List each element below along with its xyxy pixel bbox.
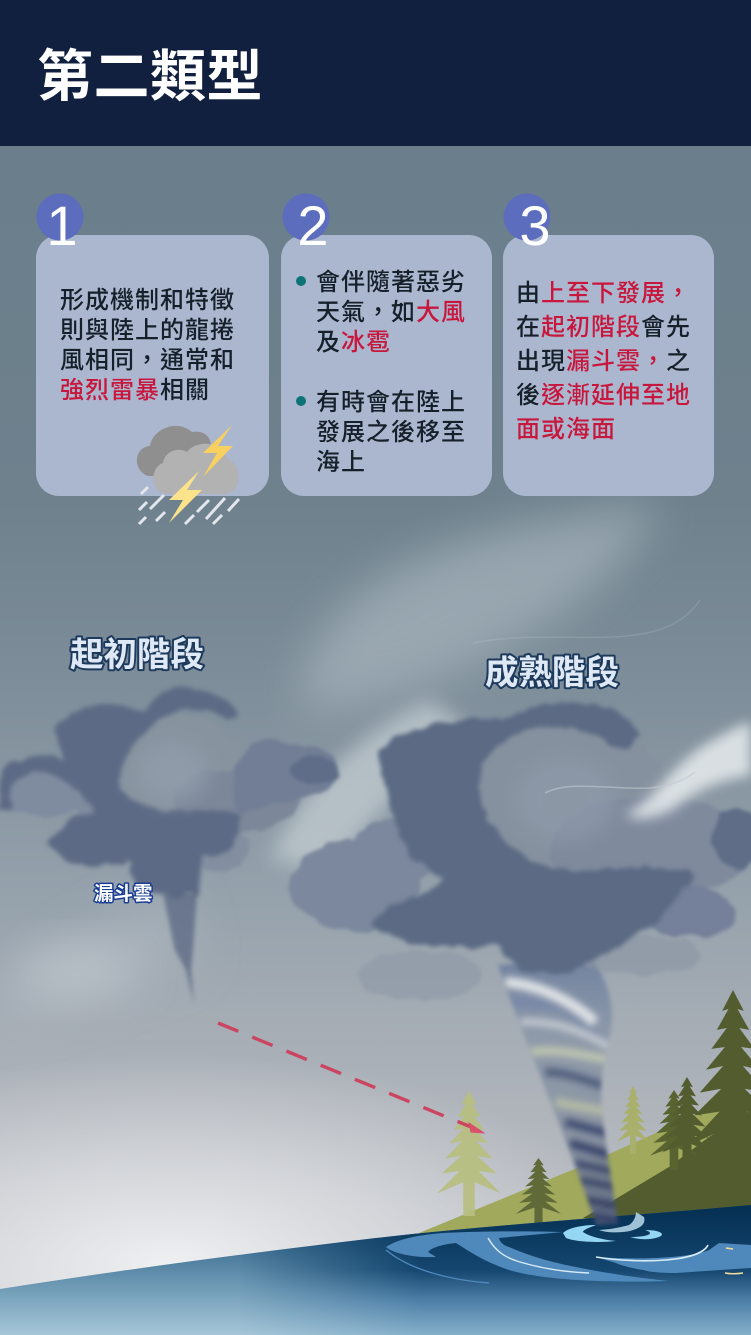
- panel: step 2: [281, 194, 492, 496]
- number 2: 2: [297, 194, 329, 257]
- step 1 text: 強烈雷暴: [60, 377, 160, 404]
- twin dark pines: [650, 1090, 682, 1166]
- bullet one text: 大風: [416, 299, 466, 326]
- bullet one: [296, 276, 306, 286]
- bullet two: [296, 396, 306, 406]
- step 3 text: 漏斗雲，之: [566, 348, 691, 375]
- step 3 text: 由: [516, 280, 541, 307]
- far light tree: [617, 1086, 649, 1154]
- number 1: 1: [46, 194, 78, 257]
- number badge 3: [504, 194, 550, 240]
- step 3 text: 後: [516, 382, 541, 409]
- light pine tree: [437, 1091, 501, 1216]
- label: funnel cloud: 漏斗雲: [94, 883, 153, 905]
- bullet one text: 冰雹: [341, 329, 391, 356]
- step 3 text: 上至下發展，: [541, 280, 691, 307]
- number badge 2: [282, 194, 330, 240]
- light green hill: [419, 1112, 748, 1233]
- small dark pine tree: [516, 1158, 561, 1226]
- right wave: [596, 1243, 751, 1273]
- bullet two text: 有時會在陸上: [316, 389, 466, 416]
- wave highlights: [488, 1238, 589, 1273]
- card background: [36, 235, 269, 496]
- terrain and trees: [419, 990, 751, 1240]
- bullet one text: 會伴隨著惡劣: [316, 269, 466, 296]
- initial-stage storm cloud: [0, 688, 341, 897]
- card background: [503, 235, 714, 496]
- water surface: [0, 1205, 751, 1335]
- step 3 text: 面或海面: [516, 416, 616, 443]
- step 1 text: 則與陸上的龍捲: [60, 317, 235, 344]
- bullet two text: 發展之後移至: [316, 419, 466, 446]
- panel: step 3: [503, 194, 714, 496]
- white wisp: [625, 722, 751, 818]
- step 1 text: 風相同，通常和: [60, 347, 235, 374]
- step 3 text: 出現: [516, 348, 566, 375]
- vortex base ripples: [563, 1212, 662, 1242]
- panel: step 1: [36, 194, 269, 524]
- tornado: [498, 962, 620, 1226]
- card background: [281, 235, 492, 496]
- number badge 1: [36, 194, 84, 240]
- foam marks: [725, 1248, 743, 1274]
- funnel cloud: [163, 893, 197, 1003]
- swirling wave: [386, 1231, 669, 1282]
- title: 第二類型: [37, 45, 263, 108]
- header bar: [0, 0, 751, 146]
- step 1 text: 相關: [160, 377, 210, 404]
- label: mature stage: 成熟階段: [485, 655, 619, 692]
- icon: thunderstorm cloud: [137, 425, 239, 524]
- step 3 text: 逐漸延伸至地: [541, 382, 691, 409]
- step 1 text: 形成機制和特徵: [60, 287, 235, 314]
- step 3 text: 在: [516, 314, 541, 341]
- bullet one text: 及: [316, 329, 341, 356]
- bullet two text: 海上: [316, 449, 366, 476]
- label: initial stage: 起初階段: [70, 637, 204, 674]
- number 3: 3: [519, 194, 551, 257]
- bullet one text: 天氣，如: [316, 299, 416, 326]
- step 3 text: 起初階段會先: [541, 314, 691, 341]
- large pine tree: [694, 990, 751, 1140]
- mature-stage storm cloud: [290, 703, 751, 1000]
- dark hill: [583, 1112, 751, 1218]
- sky background: [0, 496, 751, 1289]
- dashed arrow: [218, 1023, 484, 1133]
